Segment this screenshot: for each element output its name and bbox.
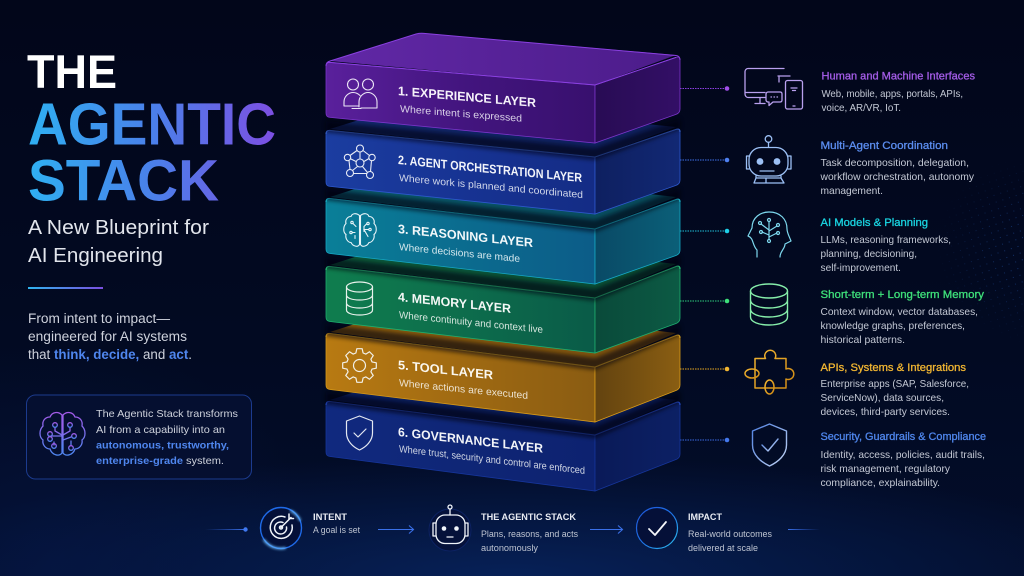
- panel: interfaces detail: [745, 68, 975, 114]
- layer 1: experience: [326, 33, 680, 143]
- heading: Security, Guardrails & Compliance: [820, 431, 986, 443]
- description: risk management, regulatory: [820, 463, 951, 475]
- description: devices, third-party services.: [820, 406, 950, 418]
- label: 6. GOVERNANCE LAYER: [398, 425, 543, 456]
- description: [820, 157, 975, 197]
- description: A goal is set: [313, 525, 360, 535]
- label: INTENT: [313, 512, 347, 523]
- description: Context window, vector databases,: [820, 306, 978, 318]
- icon: robot: [433, 505, 468, 544]
- description: Plans, reasons, and acts: [481, 529, 578, 539]
- text block: tagline: [28, 311, 192, 362]
- label: 1. EXPERIENCE LAYER: [398, 84, 536, 110]
- description: Where trust, security and control are enforced: [399, 444, 585, 477]
- icon: database: [750, 284, 788, 325]
- text block: callout copy: [96, 408, 238, 467]
- text block: callout copy: The Agentic Stack transforms: [96, 408, 238, 420]
- description: workflow orchestration, autonomy: [820, 171, 975, 183]
- icon: brain: [40, 413, 85, 455]
- description: LLMs, reasoning frameworks,: [820, 234, 951, 246]
- text block: callout copy: AI from a capability into an: [96, 424, 225, 436]
- text block: tagline: that think, decide, and act.: [28, 347, 192, 362]
- heading: Multi-Agent Coordination: [820, 140, 948, 152]
- layer 4: memory: [326, 236, 680, 353]
- description: Where continuity and context live: [399, 310, 543, 336]
- text block: tagline: From intent to impact—: [28, 311, 171, 326]
- icon: check: [649, 522, 666, 535]
- label: 2. AGENT ORCHESTRATION LAYER: [398, 153, 582, 185]
- panel: memory detail: [750, 284, 985, 346]
- icon: database: [346, 282, 372, 315]
- description: ServiceNow), data sources,: [820, 392, 944, 404]
- description: compliance, explainability.: [820, 477, 940, 489]
- panel: governance detail: [752, 424, 986, 489]
- description: voice, AR/VR, IoT.: [822, 102, 901, 114]
- label: 4. MEMORY LAYER: [398, 290, 511, 316]
- icon: shield: [346, 416, 372, 450]
- icon: brain: [344, 214, 376, 246]
- description: planning, decisioning,: [820, 248, 917, 260]
- icon: shield: [752, 424, 786, 466]
- description: [688, 529, 772, 553]
- label: THE AGENTIC STACK: [481, 512, 576, 523]
- label: 3. REASONING LAYER: [398, 222, 533, 250]
- description: Identity, access, policies, audit trails,: [820, 449, 985, 461]
- description: Where work is planned and coordinated: [399, 173, 583, 201]
- description: Enterprise apps (SAP, Salesforce,: [820, 378, 969, 390]
- title: AGENTIC: [28, 92, 276, 158]
- layer 2: agent orchestration: [326, 101, 680, 214]
- icon: devices: [745, 68, 802, 109]
- title: STACK: [28, 148, 219, 214]
- description: [820, 234, 951, 274]
- heading: Short-term + Long-term Memory: [820, 289, 985, 301]
- description: Web, mobile, apps, portals, APIs,: [822, 88, 963, 100]
- title: [27, 45, 276, 214]
- description: Real-world outcomes: [688, 529, 772, 539]
- icon: target: [270, 514, 294, 538]
- arrow: [590, 526, 622, 534]
- layer 6: governance: [326, 371, 680, 491]
- text block: tagline: engineered for AI systems: [28, 329, 187, 344]
- flow: intent: [205, 508, 360, 548]
- subtitle: A New Blueprint for: [28, 216, 209, 239]
- icon: puzzle: [745, 350, 794, 394]
- icon: people: [344, 79, 377, 108]
- icon: robot: [746, 136, 791, 183]
- panel: tools detail: [745, 350, 969, 418]
- icon: network: [344, 145, 375, 178]
- description: historical patterns.: [820, 334, 905, 346]
- layer 5: tool: [326, 303, 680, 422]
- description: Where actions are executed: [399, 378, 528, 402]
- description: delivered at scale: [688, 543, 758, 553]
- description: management.: [820, 185, 883, 197]
- description: [481, 529, 578, 553]
- heading: AI Models & Planning: [820, 217, 928, 229]
- panel: coordination detail: [746, 136, 975, 197]
- description: Task decomposition, delegation,: [820, 157, 969, 169]
- description: [820, 449, 985, 489]
- label: 5. TOOL LAYER: [398, 358, 493, 382]
- description: Where decisions are made: [399, 242, 520, 265]
- description: Where intent is expressed: [400, 104, 522, 125]
- arrow: [378, 526, 414, 534]
- text block: callout copy: autonomous, trustworthy,: [96, 440, 229, 452]
- heading: Human and Machine Interfaces: [822, 70, 975, 82]
- panel: reasoning detail: [748, 212, 951, 274]
- description: [820, 306, 978, 346]
- title: THE: [27, 45, 117, 98]
- text block: callout copy: enterprise-grade system.: [96, 455, 224, 467]
- subtitle: [28, 216, 209, 267]
- icon: head with circuit: [748, 212, 791, 257]
- connector lines: [680, 86, 729, 442]
- description: [822, 88, 963, 114]
- description: autonomously: [481, 543, 538, 553]
- layer 3: reasoning: [326, 168, 680, 284]
- heading: APIs, Systems & Integrations: [820, 362, 967, 374]
- panel: callout: [26, 395, 252, 479]
- description: knowledge graphs, preferences,: [820, 320, 965, 332]
- label: IMPACT: [688, 512, 722, 523]
- subtitle: AI Engineering: [28, 244, 163, 267]
- flow: impact: [636, 508, 820, 553]
- description: self-improvement.: [820, 262, 901, 274]
- description: [820, 378, 969, 418]
- icon: gear: [343, 349, 376, 382]
- flow: the agentic stack: [429, 505, 578, 553]
